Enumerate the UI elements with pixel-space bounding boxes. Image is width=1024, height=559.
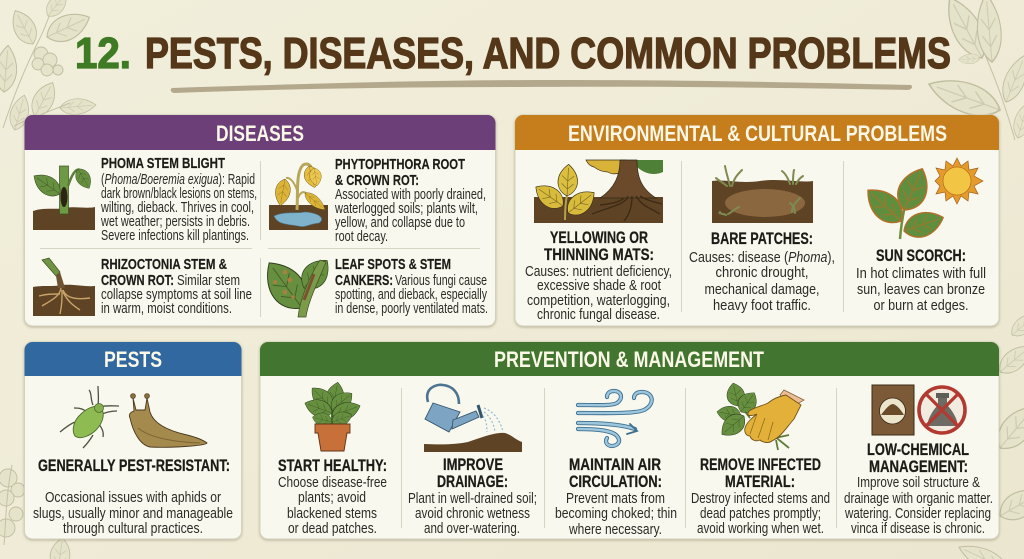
panel: prevention and management xyxy=(260,342,999,539)
botanical background: bottom left sprig xyxy=(0,465,72,559)
icon: gloved hand removing infected stem xyxy=(716,381,804,450)
text: rhizoctonia stem rot: collapse symptoms at soil line xyxy=(101,287,252,303)
text: yellowing or thinning mats: THINNING MATS: xyxy=(544,246,654,264)
text: start healthy xyxy=(278,457,387,537)
text: sun scorch: In hot climates with full xyxy=(856,266,986,282)
icon: aphid xyxy=(60,386,119,448)
text: pests: GENERALLY PEST-RESISTANT: xyxy=(38,457,230,475)
icon: rhizoctonia stem rot xyxy=(33,258,95,316)
text: improve drainage: DRAINAGE: xyxy=(437,473,508,491)
text: leaf spots and cankers: LEAF SPOTS & STEM xyxy=(335,256,451,273)
text: rhizoctonia stem rot: in warm, moist conditions. xyxy=(101,301,232,317)
text: maintain air circulation: becoming choked; thin xyxy=(555,506,677,522)
text: pests: slugs, usually minor and manageable xyxy=(33,506,233,522)
heading: prevention and management: PREVENTION & MANAGEMENT xyxy=(494,347,764,372)
text: maintain air circulation: Prevent mats from xyxy=(566,491,665,507)
text: start healthy: blackened stems xyxy=(287,506,377,522)
text: phytophthora root rot: root decay. xyxy=(335,229,388,245)
text: phytophthora root rot: waterlogged soils; plants wilt, xyxy=(334,201,478,217)
text: low-chemical management: vinca if disease is chronic. xyxy=(851,521,985,537)
text: yellowing or thinning mats: chronic fungal disease. xyxy=(537,307,660,323)
text: bare patches xyxy=(689,230,835,314)
text: yellowing or thinning mats: excessive shade & root xyxy=(537,278,661,294)
text: phoma stem blight: (Phoma/Boeremia exigua): Rapid xyxy=(101,172,255,188)
title: 12. xyxy=(75,29,131,78)
icon: no chemicals sign xyxy=(919,387,965,433)
text: leaf spots and cankers: in dense, poorly ventilated mats. xyxy=(335,301,488,317)
heading: pests: PESTS xyxy=(104,347,162,372)
icon: bare patches xyxy=(712,166,813,223)
icon: leaf spots and cankers xyxy=(256,253,336,318)
panel: diseases xyxy=(24,115,496,326)
text: rhizoctonia stem rot: CROWN ROT: xyxy=(101,272,174,289)
text: phoma stem blight: dark brown/black lesions on stems, xyxy=(101,186,257,202)
text: improve drainage: IMPROVE xyxy=(443,456,503,474)
text: rhizoctonia stem rot: RHIZOCTONIA STEM & xyxy=(101,256,227,273)
text: bare patches: BARE PATCHES: xyxy=(711,230,813,248)
text: remove infected material: avoid working when wet. xyxy=(697,521,824,537)
icon: wind xyxy=(578,391,652,446)
text: maintain air circulation: where necessary. xyxy=(568,522,662,538)
text: low-chemical management: LOW-CHEMICAL xyxy=(867,441,969,459)
text: phoma stem blight: Severe infections kill plantings. xyxy=(101,228,249,244)
text: low-chemical management xyxy=(844,441,993,537)
botanical background: top right sprig xyxy=(924,0,1024,140)
text: leaf spots and cankers: spotting, and dieback, especially xyxy=(335,287,488,303)
text: phoma stem blight xyxy=(100,155,257,244)
text: start healthy: plants; avoid xyxy=(298,490,366,506)
text: bare patches: heavy foot traffic. xyxy=(713,298,811,314)
text: remove infected material: MATERIAL: xyxy=(725,473,795,491)
text: improve drainage: Plant in well-drained soil; xyxy=(408,491,537,507)
text: start healthy: or dead patches. xyxy=(288,521,377,537)
text: maintain air circulation: CIRCULATION: xyxy=(569,473,662,491)
text: improve drainage xyxy=(408,456,537,537)
panel: pests xyxy=(24,342,242,539)
text: rhizoctonia stem rot xyxy=(101,256,252,317)
text: low-chemical management: Improve soil structure & xyxy=(857,475,980,491)
text: leaf spots and cankers: CANKERS: xyxy=(335,272,393,289)
text: maintain air circulation: MAINTAIN AIR xyxy=(569,456,661,474)
text: bare patches: mechanical damage, xyxy=(704,282,820,298)
text: leaf spots and cankers: Various fungi cause xyxy=(395,273,487,289)
text: sun scorch: SUN SCORCH: xyxy=(876,247,966,265)
text: improve drainage: avoid chronic wetness xyxy=(415,506,530,522)
text: phoma stem blight: PHOMA STEM BLIGHT xyxy=(101,155,225,172)
text: phoma stem blight: wilting, dieback. Thrives in cool, xyxy=(100,200,254,216)
text: sun scorch xyxy=(856,247,986,314)
botanical background: bottom right sprig xyxy=(955,308,1024,559)
icon: compost bag xyxy=(872,385,914,435)
icon: yellowing mat with tree roots xyxy=(530,160,663,223)
text: sun scorch: sun, leaves can bronze xyxy=(857,282,985,298)
text: phoma stem blight: wet weather; persists in debris. xyxy=(100,214,250,230)
icon: slug xyxy=(129,394,207,447)
text: leaf spots and cankers xyxy=(335,256,488,317)
heading: diseases: DISEASES xyxy=(216,121,304,146)
text: rhizoctonia stem rot: Similar stem xyxy=(177,273,240,289)
text: remove infected material: REMOVE INFECTED xyxy=(700,456,821,474)
icon: watering can xyxy=(424,385,522,452)
icon: phoma stem blight xyxy=(29,166,95,230)
panel: environmental and cultural problems xyxy=(515,115,999,326)
icon: potted plant xyxy=(302,381,363,451)
text: phytophthora root rot xyxy=(334,156,486,245)
icon: phytophthora root rot xyxy=(269,164,328,230)
text: phytophthora root rot: Associated with poorly drained, xyxy=(335,187,486,203)
text: yellowing or thinning mats xyxy=(525,229,672,323)
text: improve drainage: and over-watering. xyxy=(424,521,520,537)
text: bare patches: Causes: disease (Phoma), xyxy=(689,250,835,266)
text: low-chemical management: watering. Consider replacing xyxy=(844,506,991,522)
text: yellowing or thinning mats: competition, waterlogging, xyxy=(527,293,670,309)
botanical background: top left sprig xyxy=(0,0,97,132)
title underline xyxy=(171,80,912,93)
text: start healthy: START HEALTHY: xyxy=(278,457,387,475)
text: remove infected material xyxy=(691,456,830,537)
text: start healthy: Choose disease-free xyxy=(278,475,387,491)
text: sun scorch: or burn at edges. xyxy=(874,298,968,314)
text: pests: Occasional issues with aphids or xyxy=(45,490,221,506)
text: phytophthora root rot: yellow, and collapse due to xyxy=(335,215,465,231)
text: pests: through cultural practices. xyxy=(63,521,203,537)
text: pests xyxy=(33,457,233,537)
text: low-chemical management: MANAGEMENT: xyxy=(869,458,968,476)
text: phytophthora root rot: & CROWN ROT: xyxy=(335,172,419,189)
text: remove infected material: Destroy infected stems and xyxy=(691,491,830,507)
text: remove infected material: dead patches promptly; xyxy=(700,506,821,522)
text: maintain air circulation xyxy=(555,456,677,538)
text: yellowing or thinning mats: Causes: nutrient deficiency, xyxy=(525,264,672,280)
text: phytophthora root rot: PHYTOPHTHORA ROOT xyxy=(335,156,465,173)
icon: sun scorch xyxy=(859,158,983,242)
text: yellowing or thinning mats: YELLOWING OR xyxy=(550,229,648,247)
text: bare patches: chronic drought, xyxy=(716,265,808,281)
